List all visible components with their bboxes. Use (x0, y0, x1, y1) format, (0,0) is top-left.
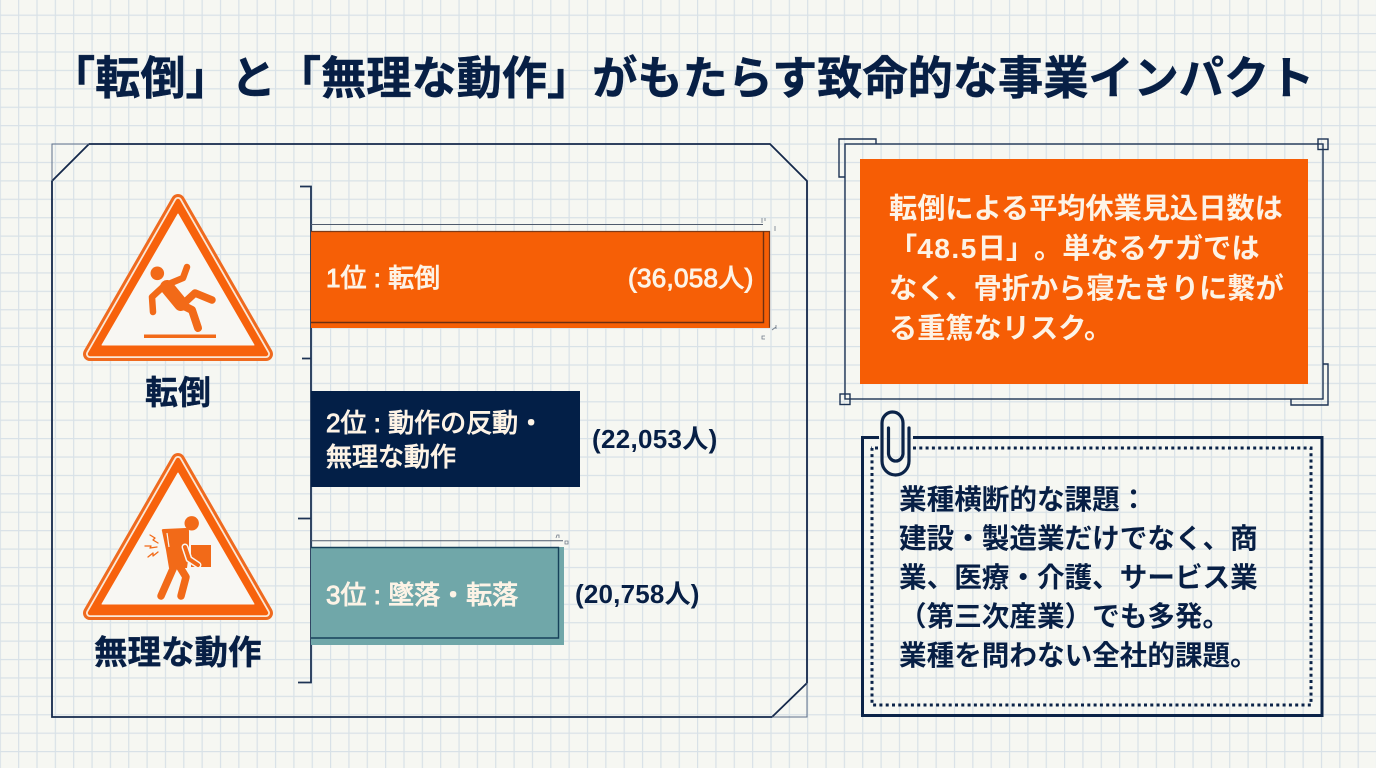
bar label: 3位 : 墜落・転落 (326, 580, 518, 610)
note text: （第三次産業）でも多発。 (899, 601, 1230, 632)
panel: ranking chart (52, 144, 807, 717)
callout text: 「48.5日」。単なるケガでは (889, 232, 1260, 264)
bar: rank 3 (311, 535, 700, 645)
callout text: る重篤なリスク。 (889, 312, 1112, 344)
icon: slip and fall warning sign (90, 201, 266, 354)
bar value: (36,058人) (628, 263, 754, 293)
note text: 建設・製造業だけでなく、商 (899, 523, 1258, 554)
title: 「転倒」と「無理な動作」がもたらす致命的な事業インパクト (50, 53, 1314, 104)
note text: 業種を問わない全社的課題。 (899, 640, 1258, 671)
callout frame (839, 139, 1328, 405)
note text: 業種横断的な課題： (899, 484, 1147, 515)
bar: rank 1 (311, 218, 776, 339)
callout text: 転倒による平均休業見込日数は (889, 192, 1283, 224)
chart axis (298, 186, 311, 682)
note frame (862, 438, 1322, 716)
bar: rank 2 (311, 391, 718, 487)
bar label: 無理な動作 (326, 442, 456, 472)
label: 無理な動作: 無理な動作 (94, 635, 262, 672)
callout text: なく、骨折から寝たきりに繋が (889, 272, 1284, 304)
icon: overexertion warning sign (90, 460, 266, 613)
note: cross-industry issue (862, 412, 1322, 716)
bar value: (20,758人) (575, 579, 700, 609)
icon: paperclip (882, 412, 909, 475)
bar label: 1位 : 転倒 (326, 263, 440, 293)
note text: 業、医療・介護、サービス業 (899, 562, 1258, 593)
panel frame (52, 144, 807, 717)
bar label: 2位 : 動作の反動・ (326, 408, 544, 438)
bar value: (22,053人) (592, 424, 718, 454)
label: 転倒: 転倒 (145, 374, 211, 411)
callout: average lost days (839, 139, 1328, 405)
